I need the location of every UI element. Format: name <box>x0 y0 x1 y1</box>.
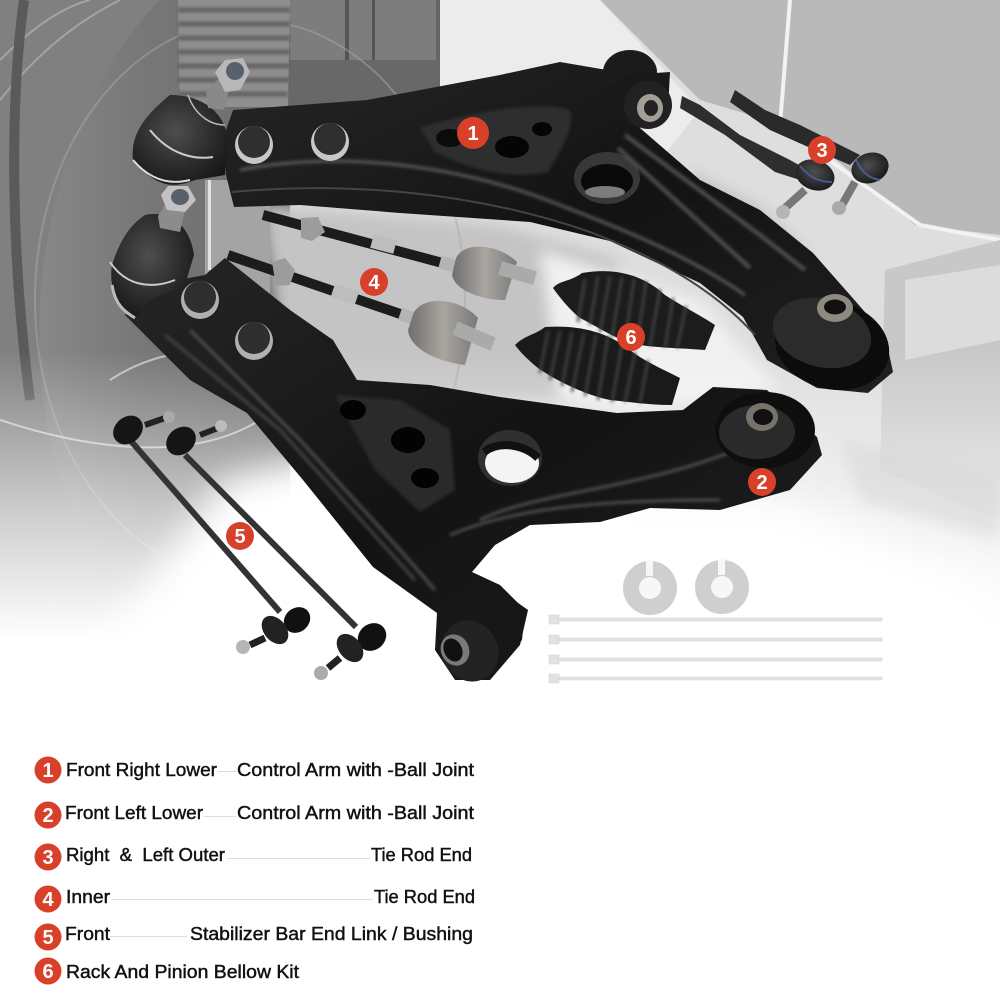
legend row 1: Control Arm with -Ball Joint <box>237 759 474 780</box>
legend row 1: Front Right Lower <box>66 759 217 780</box>
legend row 1: 1 <box>42 760 54 782</box>
legend row 4: Tie Rod End <box>374 886 475 907</box>
retaining washers <box>623 559 749 615</box>
badge 6: 6 <box>625 327 637 349</box>
legend row 2: Control Arm with -Ball Joint <box>237 802 474 823</box>
legend row 2: Front Left Lower <box>65 802 203 823</box>
bolts <box>235 123 349 164</box>
legend row 2: 2 <box>42 805 54 827</box>
part 2: front left lower control arm <box>110 186 822 691</box>
legend row 1 <box>34 756 474 784</box>
badge 2 <box>748 468 776 496</box>
part 6: rack and pinion bellows <box>515 271 715 405</box>
front bushing mount <box>765 287 899 403</box>
legend row 5: 5 <box>42 927 54 949</box>
legend row 4 <box>34 886 475 912</box>
part 5: stabilizer bar end links <box>107 410 392 680</box>
cable ties <box>549 615 882 683</box>
front right ball joint <box>133 58 250 185</box>
legend row 4: Inner <box>66 886 110 907</box>
legend row 3: 3 <box>42 847 54 869</box>
badge 1 <box>457 117 489 149</box>
spring boot <box>178 0 290 107</box>
part 3: outer tie rod ends <box>680 90 893 219</box>
badge 3: 3 <box>816 140 828 162</box>
part 4: inner tie rods <box>228 215 535 365</box>
legend row 3: Tie Rod End <box>371 844 472 865</box>
legend row 6: 6 <box>42 961 54 983</box>
bolts <box>181 281 273 360</box>
badge 5 <box>226 522 254 550</box>
front bushing mount <box>715 392 815 468</box>
legend row 3 <box>34 844 472 870</box>
legend row 4: 4 <box>42 889 54 911</box>
part 1: front right lower control arm <box>133 50 899 403</box>
badge 6 <box>617 323 645 351</box>
front left ball joint <box>110 186 196 318</box>
badge 1: 1 <box>467 123 479 145</box>
legend row 3: Right & Left Outer <box>66 844 225 865</box>
legend row 5 <box>34 923 473 950</box>
rear bushing <box>603 50 672 129</box>
legend <box>34 756 475 984</box>
badge 4: 4 <box>368 272 380 294</box>
badge 4 <box>360 268 388 296</box>
legend row 6: Rack And Pinion Bellow Kit <box>66 961 299 982</box>
badge 2: 2 <box>756 472 768 494</box>
badge 3 <box>808 136 836 164</box>
legend row 6 <box>34 958 299 984</box>
rear bushing <box>432 590 528 691</box>
legend row 2 <box>34 802 474 828</box>
badge 5: 5 <box>234 526 246 548</box>
legend row 5: Front <box>65 923 110 944</box>
legend row 5: Stabilizer Bar End Link / Bushing <box>190 923 473 944</box>
